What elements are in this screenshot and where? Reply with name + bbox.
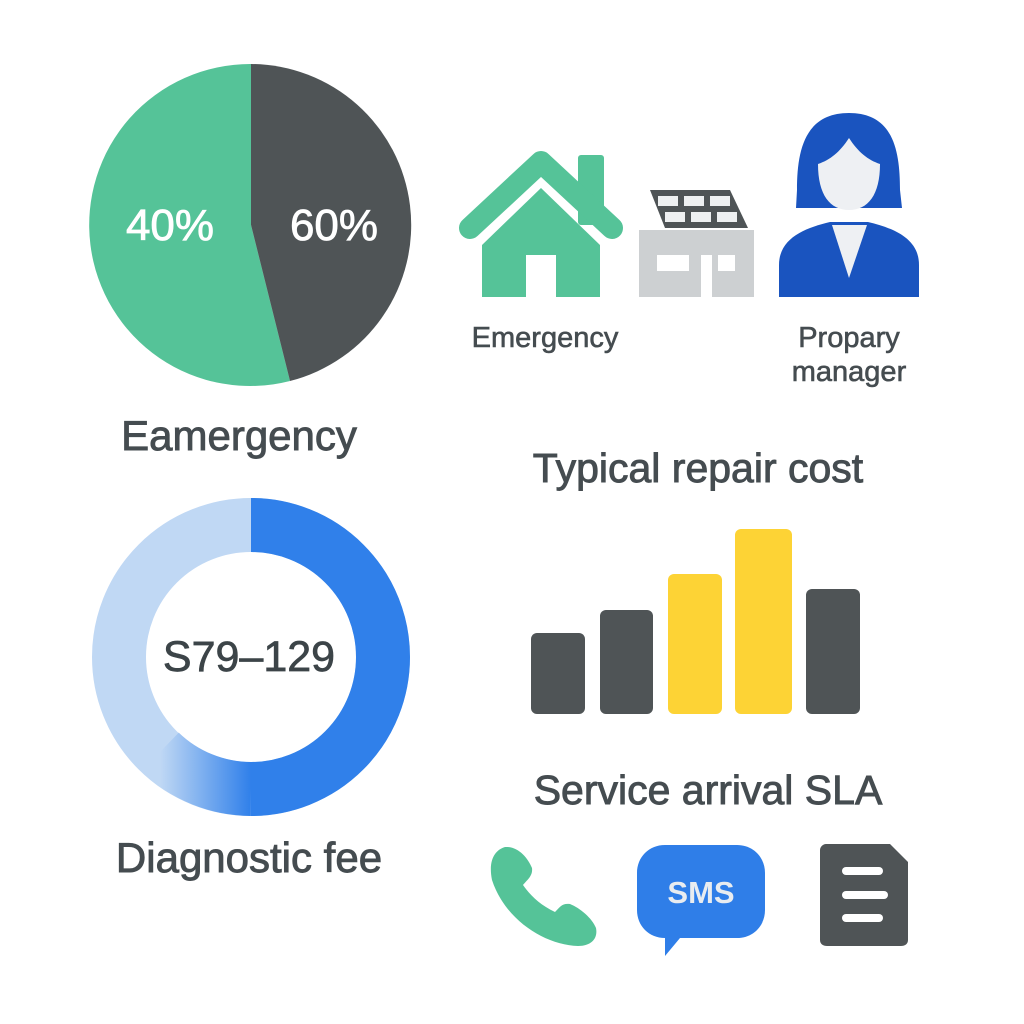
icon: SMS bubble: SMS [667,875,735,910]
icon: woman property manager [779,113,919,297]
label: Property manager: Propary [798,322,900,354]
bar chart [531,529,860,714]
donut chart [119,525,383,789]
label: Property manager: manager [792,356,907,388]
icon: phone [491,847,596,946]
icon: building with solar panel [639,190,754,297]
icon: house [470,155,612,297]
icon: SMS bubble [637,845,765,956]
icon: document [820,844,908,946]
donut caption: Diagnostic fee [116,834,382,881]
pie chart [89,64,411,386]
heading: Typical repair cost: Typical repair cost [533,445,864,491]
pie label 40%: 40% [126,201,214,250]
pie label 60%: 60% [290,201,378,250]
pie caption: Eamergency [121,412,357,459]
label: Emergency: Emergency [472,322,619,354]
heading: Service arrival SLA: Service arrival SLA [534,767,883,813]
donut value: S79–129 [163,633,335,681]
